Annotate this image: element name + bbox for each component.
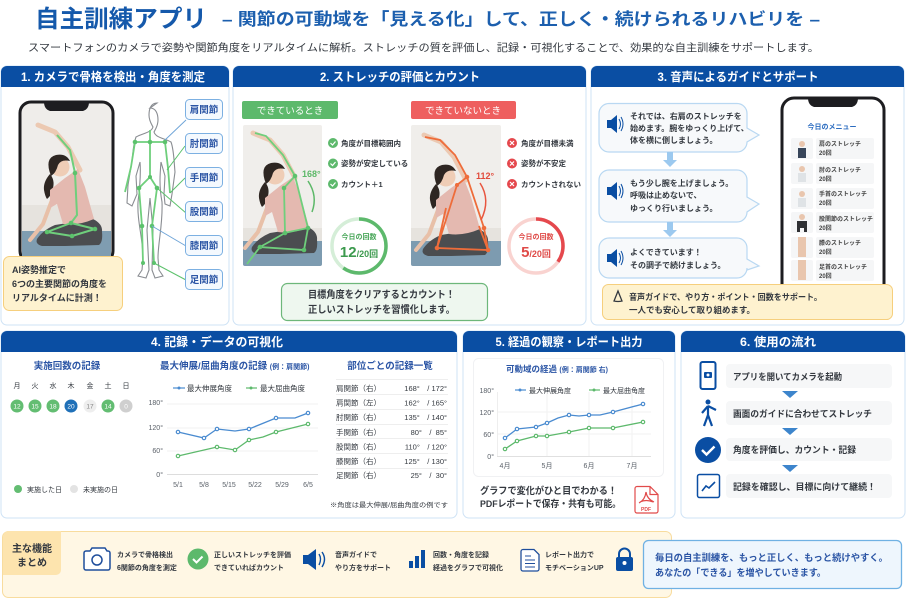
voice bubble 1: 体を横に倒しましょう。 (630, 135, 718, 145)
voice bubble 1: それでは、右肩のストレッチを (630, 111, 742, 121)
table: records by joint: 135° / 140° (404, 413, 447, 422)
voice bubble 2 (599, 170, 759, 222)
table: records by joint (330, 360, 449, 509)
subtitle: – 関節の可動域を「見える化」して、正しく・続けられるリハビリを – (222, 9, 820, 29)
calendar: 未実施の日 (83, 485, 118, 494)
table: records by joint: 部位ごとの記録一覧 (347, 360, 433, 372)
line chart: range of motion (474, 358, 664, 476)
icon: lock (616, 548, 633, 571)
calendar: 月 (14, 382, 20, 390)
calendar: 20 (67, 404, 75, 410)
phone menu: 肘のストレッチ (819, 166, 861, 174)
step 1: アプリを開いてカメラを起動 (733, 371, 842, 382)
phone menu: 股関節のストレッチ (819, 215, 873, 223)
step 2 (702, 400, 892, 426)
calendar: 17 (86, 404, 94, 410)
AI callout (4, 256, 122, 310)
arrow (782, 391, 798, 398)
panel 5 heading: 5. 経過の観察・レポート出力 (496, 334, 642, 349)
line chart: max extension and flexion: 最大屈曲角度 (260, 383, 305, 393)
feature: camera (84, 548, 177, 572)
bad tag: できていないとき (425, 106, 501, 117)
good tag (242, 101, 338, 119)
calendar: 15 (31, 404, 39, 410)
bad pose photo: 112° (476, 171, 495, 181)
calendar: 金 (86, 381, 94, 390)
feature: report (521, 550, 604, 572)
icon: PDF: PDF (641, 507, 651, 513)
good checklist: 姿勢が安定している (341, 158, 408, 168)
summary tag: 主な機能 (12, 542, 52, 555)
calendar: 水 (50, 381, 56, 390)
ring: 5 of 20: 5/20回 (521, 244, 551, 261)
phone with pose photo (20, 102, 113, 262)
body skeleton figure (125, 103, 186, 280)
phone menu: 20回 (819, 176, 832, 183)
line chart: range of motion: 5月 (542, 462, 552, 470)
line chart: max extension and flexion: 5/15 (222, 482, 236, 489)
feature: report: レポート出力で (545, 550, 594, 559)
line chart: max extension and flexion (149, 360, 318, 489)
step 1 (700, 362, 892, 389)
AI callout: AI姿勢推定で (12, 264, 66, 275)
feature: chart: 経過をグラフで可視化 (433, 563, 503, 572)
calendar: 14 (104, 404, 112, 410)
feature: report: モチベーションUP (545, 564, 604, 572)
bad checklist: 角度が目標未満 (521, 138, 574, 148)
joint labels: 足関節 (190, 274, 219, 286)
good pose photo (243, 125, 322, 266)
joint labels: 股関節 (190, 206, 219, 218)
feature: voice: 音声ガイドで (335, 550, 377, 559)
panel 5: progress and report (463, 331, 675, 518)
phone menu (782, 98, 884, 290)
yellow callout: 音声ガイドで、やり方・ポイント・回数をサポート。 (629, 292, 822, 302)
line chart: max extension and flexion: 180° (149, 399, 163, 407)
table: records by joint: 肩関節（右） (336, 383, 381, 393)
report text (480, 485, 621, 510)
line chart: range of motion: 180° (480, 387, 494, 395)
AI callout: リアルタイムに計測！ (12, 292, 102, 303)
panel 3: voice guide (591, 66, 904, 325)
line chart: range of motion: 最大伸展角度 (529, 386, 571, 395)
joint labels: 膝関節 (190, 240, 219, 252)
step 2: 画面のガイドに合わせてストレッチ (733, 408, 872, 419)
voice bubble 1 (599, 104, 759, 152)
good checklist: カウント＋1 (341, 180, 383, 189)
phone menu: 20回 (819, 225, 832, 232)
step 3 (695, 437, 892, 463)
panel 4 heading: 4. 記録・データの可視化 (151, 334, 283, 349)
line chart: range of motion: 可動域の経過 (例：肩関節 右) (506, 364, 608, 374)
table: records by joint: 25° / 30° (411, 471, 447, 480)
line chart: max extension and flexion: 5/22 (248, 482, 262, 489)
calendar (10, 360, 132, 494)
bad pose photo (411, 125, 501, 266)
good checklist (328, 138, 408, 189)
phone menu: 膝のストレッチ (819, 239, 861, 247)
line chart: range of motion: 120° (480, 409, 494, 417)
summary band (2, 531, 672, 598)
table: records by joint: 肘関節（右） (336, 412, 381, 422)
voice bubble 2: ゆっくり行いましょう。 (630, 203, 718, 213)
bad checklist: 姿勢が不安定 (521, 158, 566, 168)
table: records by joint: 162° / 165° (404, 398, 447, 408)
bad checklist (507, 138, 581, 189)
voice bubble 3: その調子で続けましょう。 (630, 260, 726, 270)
bad tag (411, 101, 516, 119)
feature: voice: やり方をサポート (335, 563, 391, 572)
line chart: range of motion: 60° (483, 431, 494, 439)
line chart: range of motion: 4月 (500, 462, 510, 470)
line chart: max extension and flexion: 0° (156, 471, 163, 479)
phone menu: 20回 (819, 273, 832, 280)
feature: chart (409, 550, 503, 572)
step 3: 角度を評価し、カウント・記録 (733, 444, 856, 455)
intro text: スマートフォンのカメラで姿勢や関節角度をリアルタイムに解析。ストレッチの質を評価し、記録・可視化することで、効果的な自主訓練をサポートします。 (28, 41, 819, 54)
voice bubble 3: よくできています！ (630, 248, 702, 257)
title: 自主訓練アプリ (35, 6, 207, 33)
green callout: 目標角度をクリアするとカウント！ (308, 288, 455, 301)
line chart: max extension and flexion: 120° (149, 424, 163, 432)
table: records by joint: 股関節（右） (336, 442, 381, 452)
table: records by joint: 膝関節（右） (336, 456, 381, 466)
arrow (663, 222, 677, 237)
closing callout (644, 540, 902, 588)
panel 1 heading: 1. カメラで骨格を検出・角度を測定 (21, 69, 205, 84)
calendar: 実施した日 (27, 485, 62, 494)
summary tag: まとめ (17, 557, 47, 569)
panel 3 heading: 3. 音声によるガイドとサポート (658, 69, 818, 84)
table: records by joint: 手関節（右） (336, 427, 381, 437)
line chart: max extension and flexion: 最大伸展/屈曲角度の記録 (例：肩関節) (160, 360, 309, 372)
arrow (663, 152, 677, 167)
line chart: range of motion: 6月 (584, 462, 594, 470)
line chart: max extension and flexion: 5/29 (275, 482, 289, 489)
table: records by joint: ※角度は最大伸展/屈曲角度の例です (330, 500, 449, 509)
ring: 5 of 20: 今日の回数 (518, 232, 554, 241)
phone menu: 肩のストレッチ (819, 140, 861, 148)
ring: 12 of 20: 今日の回数 (342, 232, 376, 241)
table: records by joint: 110° / 120° (405, 442, 447, 452)
line chart: range of motion: 7月 (627, 462, 637, 470)
report text: PDFレポートで保存・共有も可能。 (480, 498, 621, 510)
line chart: max extension and flexion: 6/5 (303, 482, 313, 489)
good pose photo: 168° (302, 169, 321, 179)
table: records by joint: 肩関節（左） (336, 398, 381, 408)
calendar: 木 (68, 381, 74, 390)
feature: voice (303, 549, 391, 572)
phone menu: 20回 (819, 200, 832, 207)
phone menu: 20回 (819, 150, 832, 157)
good tag: できているとき (257, 106, 323, 117)
bad checklist: カウントされない (521, 180, 581, 189)
feature: camera: 6関節の角度を測定 (117, 563, 177, 572)
line chart: max extension and flexion: 最大伸展角度 (187, 383, 232, 393)
phone menu: 手首のストレッチ (819, 190, 867, 198)
ring: 5 of 20 (509, 219, 563, 273)
feature: check: 正しいストレッチを評価 (214, 550, 291, 559)
table: records by joint: 80° / 85° (411, 428, 447, 437)
calendar: 0 (124, 404, 128, 410)
panel 1: camera skeleton detection (1, 66, 229, 325)
ring: 12 of 20: 12/20回 (340, 244, 378, 261)
panel 6 heading: 6. 使用の流れ (740, 334, 816, 349)
joint labels: 肘関節 (190, 138, 219, 150)
step 4: 記録を確認し、目標に向けて継続！ (733, 481, 876, 492)
line chart: range of motion: 0° (487, 453, 494, 461)
joint labels (186, 100, 222, 290)
closing callout: 毎日の自主訓練を、もっと正しく、もっと続けやすく。 (655, 552, 888, 564)
calendar: 土 (104, 381, 112, 390)
AI callout: 6つの主要関節の角度を (12, 278, 107, 289)
green callout: 正しいストレッチを習慣化します。 (308, 303, 455, 316)
arrow (782, 428, 798, 435)
arrow (782, 465, 798, 472)
panel 6: usage flow (681, 331, 905, 518)
table: records by joint: 足関節（右） (336, 470, 381, 480)
green callout (282, 284, 488, 320)
feature: camera: カメラで骨格検出 (117, 550, 173, 559)
report text: グラフで変化がひと目でわかる！ (480, 485, 617, 497)
closing callout: あなたの「できる」を増やしていきます。 (655, 567, 826, 579)
joint labels: 手関節 (190, 172, 219, 184)
feature: check (188, 548, 291, 572)
joint labels: 肩関節 (190, 104, 219, 116)
calendar: 18 (49, 404, 57, 410)
icon: PDF (635, 486, 658, 513)
table: records by joint: 125° / 130° (404, 457, 447, 466)
yellow callout (602, 284, 892, 320)
calendar: 火 (32, 382, 38, 390)
line chart: max extension and flexion: 5/8 (199, 482, 209, 489)
summary tag (3, 531, 61, 575)
voice bubble 2: 呼吸は止めないで、 (630, 190, 701, 200)
phone menu: 今日のメニュー (808, 122, 856, 131)
phone menu: 足首のストレッチ (819, 263, 867, 271)
step 4 (698, 474, 892, 498)
feature: check: できていればカウント (214, 563, 284, 572)
line chart: range of motion: 最大屈曲角度 (603, 386, 645, 395)
calendar: 実施回数の記録 (34, 360, 101, 372)
table: records by joint: 168° / 172° (404, 384, 447, 393)
calendar: 12 (13, 404, 21, 410)
ring: 12 of 20 (332, 219, 386, 273)
line chart: max extension and flexion: 60° (152, 447, 163, 455)
panel 2 heading: 2. ストレッチの評価とカウント (320, 69, 480, 84)
voice bubble 3 (599, 238, 759, 278)
line chart: max extension and flexion: 5/1 (173, 482, 183, 489)
good checklist: 角度が目標範囲内 (341, 138, 401, 148)
panel 4: records and data (1, 331, 457, 518)
phone menu: 20回 (819, 249, 832, 256)
voice bubble 1: 始めます。腕をゆっくり上げて、 (630, 123, 749, 133)
voice bubble 2: もう少し腕を上げましょう。 (630, 178, 733, 188)
feature: chart: 回数・角度を記録 (433, 550, 489, 559)
panel 2: stretch evaluation (233, 66, 586, 325)
yellow callout: 一人でも安心して取り組めます。 (629, 305, 755, 315)
calendar: 日 (122, 382, 130, 390)
